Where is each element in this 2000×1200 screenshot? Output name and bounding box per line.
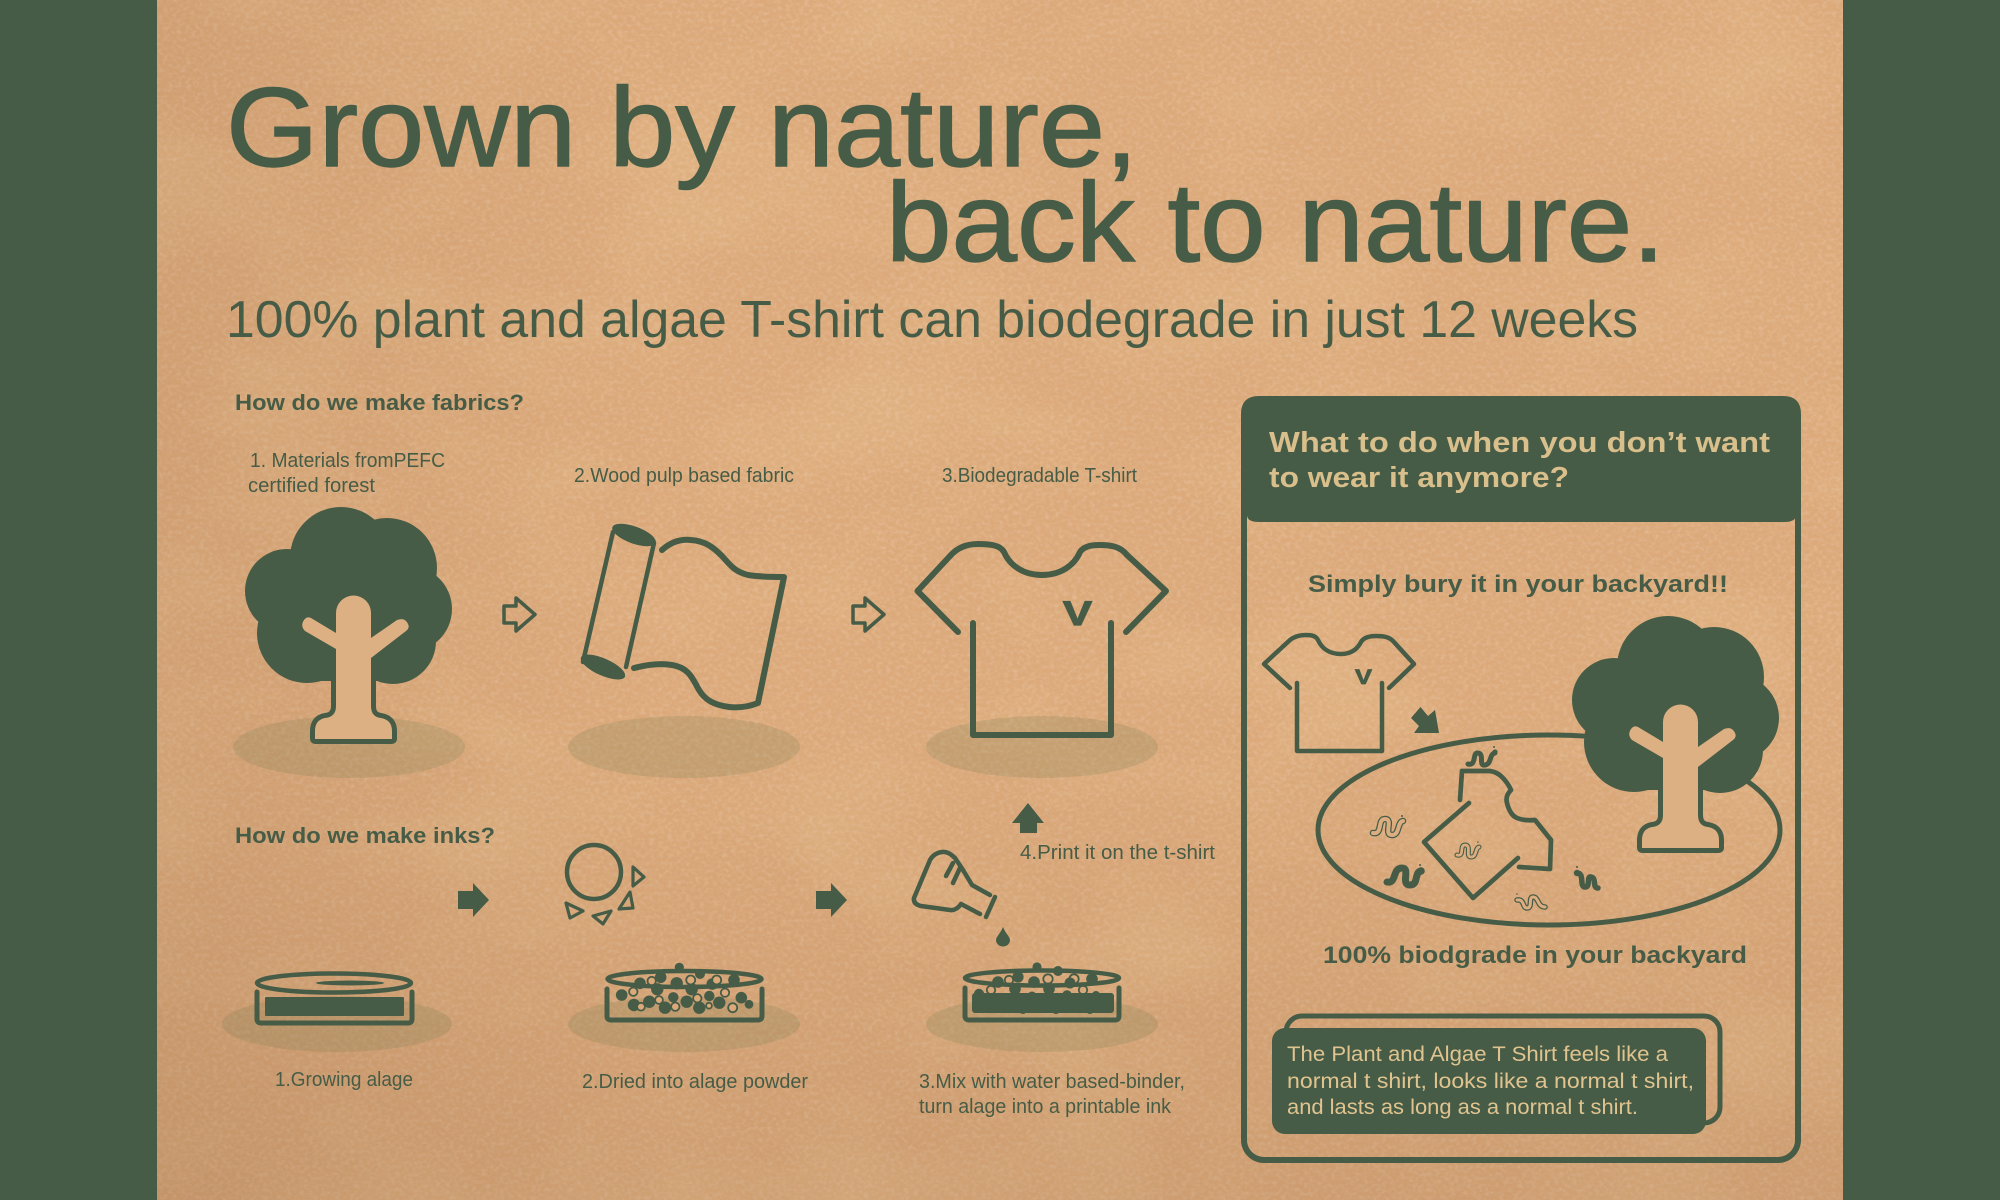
worm: large filled	[1387, 864, 1425, 885]
label: ink step 1: 1.Growing alage	[275, 1069, 413, 1091]
arrow: shirt into ground	[1411, 707, 1439, 733]
label: print step: 4.Print it on the t-shirt	[1020, 842, 1215, 864]
label: ink step 3	[919, 1071, 1185, 1118]
worm: hollow bottom	[1516, 893, 1545, 908]
label: fabric step 2: 2.Wood pulp based fabric	[574, 465, 794, 487]
shadow: dish 3	[926, 996, 1158, 1052]
worm: hollow centre	[1457, 841, 1479, 857]
callout text: normal t shirt, looks like a normal t shirt,	[1287, 1070, 1694, 1093]
icon: small t-shirt: V	[1355, 666, 1372, 689]
icon: dish with mixed ink	[965, 962, 1119, 1020]
label: fabric step 3: 3.Biodegradable T-shirt	[942, 465, 1137, 487]
label: fabric step 1	[248, 450, 445, 497]
arrow: step 1 to step 2	[458, 883, 489, 917]
panel border	[1244, 420, 1798, 1160]
text: bury instruction: Simply bury it in your backyard!!	[1308, 571, 1728, 598]
shadow: fabric	[568, 716, 800, 778]
text: biodegrade caption: 100% biodgrade in your backyard	[1323, 942, 1747, 969]
panel header	[1241, 396, 1801, 522]
callout text: The Plant and Algae T Shirt feels like a	[1287, 1043, 1668, 1066]
shadow: tree	[233, 716, 465, 778]
worm: hollow left	[1373, 815, 1403, 835]
icon: fabric roll	[578, 519, 784, 707]
panel heading text: What to do when you don’t want	[1269, 427, 1770, 459]
icon: tree	[245, 507, 452, 739]
worm: top filled	[1468, 746, 1498, 765]
callout text	[1287, 1043, 1694, 1119]
arrow: up to t-shirt	[1012, 803, 1044, 833]
icon: sun drying	[566, 845, 644, 924]
callout text: and lasts as long as a normal t shirt.	[1287, 1096, 1638, 1119]
icon: tree in backyard	[1572, 616, 1779, 848]
subtitle: 100% plant and algae T-shirt can biodegrade in just 12 weeks	[226, 291, 1638, 349]
icon: pouring bottle	[914, 852, 1010, 946]
worm: right filled	[1574, 866, 1598, 888]
burial ground ellipse	[1318, 735, 1780, 925]
label: fabric step 1: 1. Materials fromPEFC	[250, 450, 445, 472]
label: ink step 3: turn alage into a printable ink	[919, 1096, 1172, 1118]
icon: t-shirt	[918, 544, 1166, 735]
heading: inks: How do we make inks?	[235, 823, 495, 848]
shadow: t-shirt	[926, 716, 1158, 778]
icon: buried t-shirt	[1424, 771, 1551, 898]
shadow: dish 2	[568, 996, 800, 1052]
label: ink step 3: 3.Mix with water based-binder,	[919, 1071, 1185, 1093]
arrow: fabric to t-shirt	[853, 598, 884, 631]
arrow: step 2 to step 3	[816, 883, 847, 917]
panel: what to do when you don't want it	[1241, 396, 1801, 1160]
panel heading text: to wear it anymore?	[1269, 462, 1569, 494]
icon: dish with growing algae	[257, 974, 412, 1023]
heading: fabrics: How do we make fabrics?	[235, 390, 524, 415]
icon: worms	[1373, 746, 1598, 908]
panel heading text	[1269, 427, 1770, 494]
title: Grown by nature,	[226, 65, 1138, 190]
callout: back outline card	[1286, 1016, 1720, 1123]
label: fabric step 1: certified forest	[248, 475, 375, 497]
callout: front card	[1272, 1028, 1706, 1134]
label: ink step 2: 2.Dried into alage powder	[582, 1071, 808, 1093]
icon: dish with algae powder	[607, 963, 762, 1020]
title	[226, 65, 1665, 285]
title: back to nature.	[886, 160, 1665, 285]
icon: t-shirt: V	[1063, 595, 1092, 633]
shadow: dish 1	[222, 996, 452, 1052]
icon: small t-shirt	[1264, 635, 1414, 751]
arrow: tree to fabric	[504, 598, 535, 631]
